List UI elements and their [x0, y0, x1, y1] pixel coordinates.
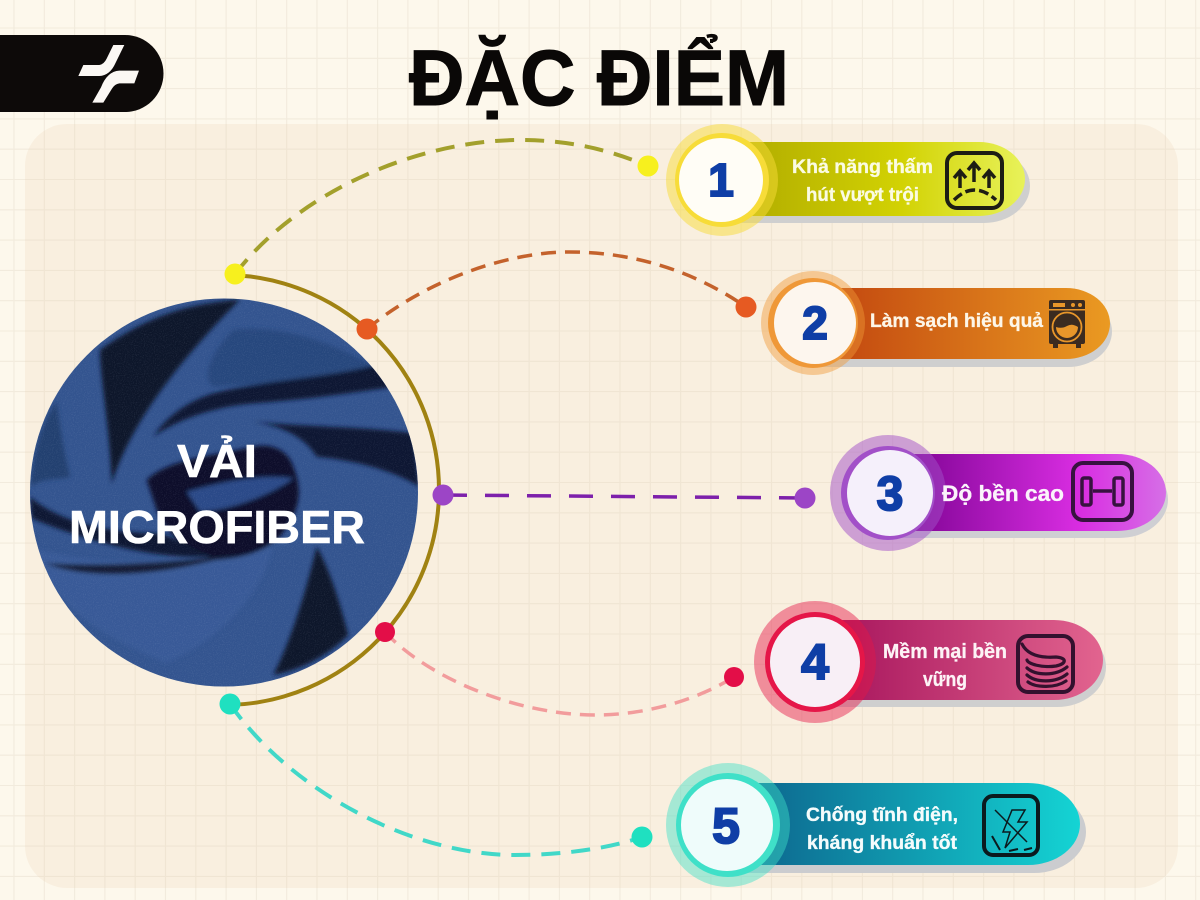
item 4: softness: vững [923, 669, 967, 691]
item 5: antistatic: kháng khuẩn tốt [807, 833, 958, 854]
connector: dashed line 5 [230, 704, 642, 855]
center label [69, 435, 365, 553]
icon: dumbbell [1073, 463, 1132, 520]
item 2: cleaning: Làm sạch hiệu quả [870, 311, 1043, 332]
icon: washing machine [1049, 300, 1085, 348]
item 3: durability [830, 435, 1168, 551]
item 4: softness: 4 [801, 634, 829, 690]
item 2: cleaning: 2 [802, 297, 828, 349]
node dots [220, 156, 816, 848]
item 5: antistatic: Chống tĩnh điện, [806, 805, 958, 826]
logo badge [0, 35, 164, 112]
item 3: durability: Độ bền cao [942, 481, 1064, 506]
icon: absorption arrows [947, 153, 1002, 208]
icon: soft coil [1018, 636, 1073, 692]
connector: dashed line 3 [443, 495, 805, 498]
title: ĐẶC ĐIỂM [409, 33, 789, 122]
center label: VẢI [177, 435, 257, 487]
item 4: softness: Mềm mại bền [883, 641, 1007, 663]
item 5: antistatic: 5 [712, 798, 740, 854]
fabric photo circle [30, 298, 419, 688]
item 1: absorbency [666, 124, 1030, 236]
item 1: absorbency: hút vượt trội [806, 185, 919, 206]
icon: no static [984, 796, 1038, 855]
item 2: cleaning [761, 271, 1112, 375]
connector: dashed line 4 [385, 632, 734, 715]
item 4: softness [754, 601, 1106, 723]
item 1: absorbency: Khả năng thấm [792, 157, 933, 178]
item 1: absorbency: 1 [708, 154, 734, 206]
arc around fabric circle [230, 275, 439, 705]
center label: MICROFIBER [69, 501, 365, 553]
connector: dashed line 1 [235, 140, 648, 274]
item 5: antistatic [666, 763, 1086, 887]
item 3: durability: 3 [877, 468, 903, 521]
connector: dashed line 2 [367, 252, 746, 329]
